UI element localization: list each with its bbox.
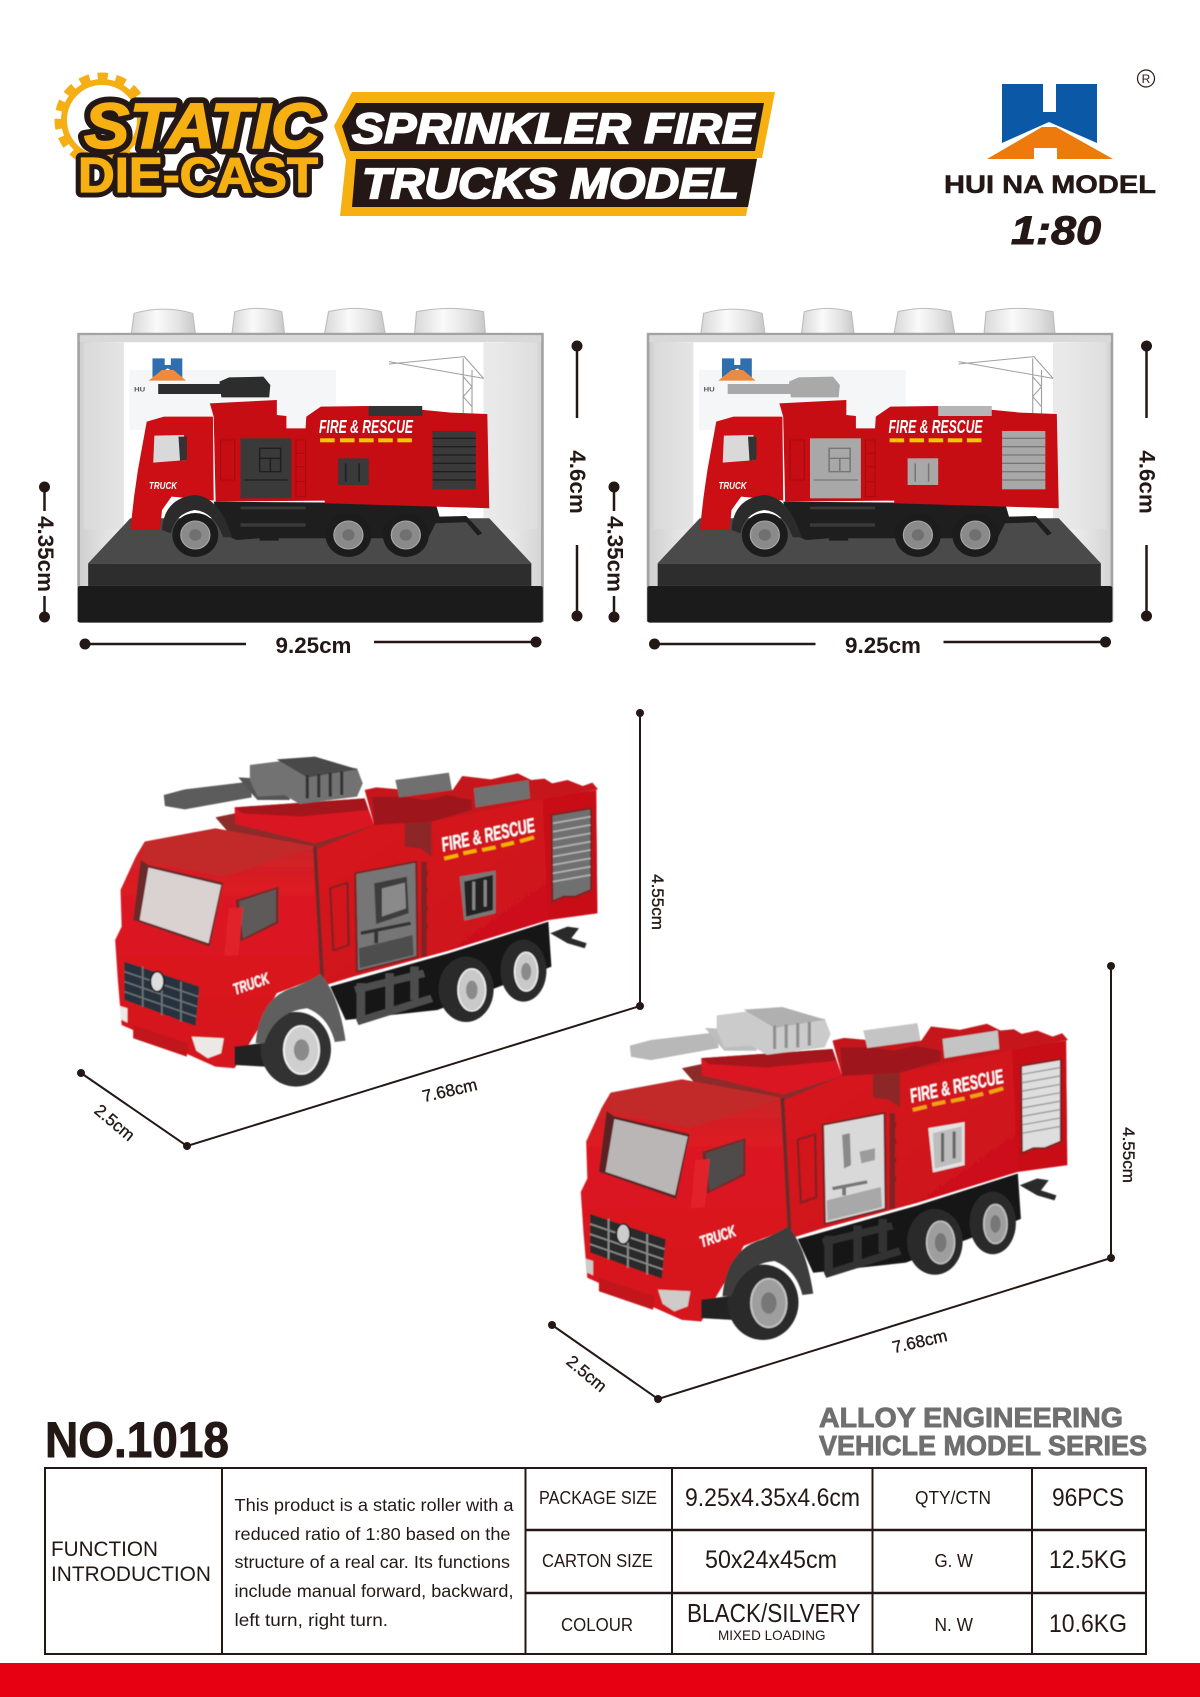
windshield <box>599 1111 690 1199</box>
colour row: COLOUR <box>561 1615 633 1635</box>
grille <box>124 962 199 1026</box>
function introduction text: This product is a static roller with a <box>234 1495 514 1515</box>
truck cab <box>130 417 214 530</box>
icon: gear <box>59 77 145 163</box>
series heading <box>819 1402 1147 1461</box>
cab rear edge <box>315 847 323 987</box>
icon: orange roof <box>987 127 1113 159</box>
brand name: HUI NA MODEL <box>944 171 1156 199</box>
truck label: fire and rescue: FIRE & RESCUE <box>319 417 414 437</box>
model number: NO.1018 <box>45 1412 229 1468</box>
package row: 96PCS <box>1052 1484 1124 1512</box>
registered mark: R <box>1142 72 1151 86</box>
middle wheel <box>907 1209 963 1275</box>
function introduction label: INTRODUCTION <box>51 1563 211 1586</box>
rear wheel <box>952 513 998 557</box>
display base <box>658 518 1101 563</box>
colour row: BLACK/SILVERY <box>687 1598 860 1628</box>
headlights <box>120 1006 224 1058</box>
box body <box>315 790 597 987</box>
chassis <box>798 1174 1021 1273</box>
clear case <box>79 334 542 621</box>
depth dimension <box>33 482 58 622</box>
roller shutter <box>551 808 591 902</box>
water cannon <box>630 1007 831 1060</box>
cab <box>115 828 321 1068</box>
middle wheel <box>439 957 494 1022</box>
package row: 9.25x4.35x4.6cm <box>685 1484 860 1512</box>
front wheel <box>701 1265 799 1340</box>
equipment on roof <box>832 1024 1068 1076</box>
case studs <box>131 308 485 333</box>
backdrop logo: HU <box>134 386 145 393</box>
panel: black turret truck <box>115 757 598 1087</box>
backdrop crane <box>958 357 1053 415</box>
side window <box>235 887 279 942</box>
display base <box>88 518 531 563</box>
specification table <box>45 1468 1146 1654</box>
mirror <box>224 907 243 956</box>
truck two dimensions <box>548 962 1138 1403</box>
truck chassis <box>783 502 1052 541</box>
height dimension: 4.6cm <box>565 450 590 514</box>
depth dimension: 4.35cm <box>602 516 628 592</box>
dimension label: height: 4.55cm <box>648 874 667 930</box>
package row: PACKAGE SIZE <box>539 1488 657 1508</box>
carton row: CARTON SIZE <box>542 1551 653 1571</box>
front wheel <box>742 513 788 557</box>
panel: silver turret truck <box>581 1007 1068 1340</box>
ladder <box>890 1113 896 1209</box>
width dimension: 9.25cm <box>845 633 921 658</box>
function introduction text: reduced ratio of 1:80 based on the <box>234 1524 510 1544</box>
roof tool boxes <box>395 773 530 807</box>
heading: die-cast: DIE-CAST <box>78 149 318 203</box>
truck one dimensions <box>77 709 667 1150</box>
truck chassis <box>214 502 482 541</box>
series heading: ALLOY ENGINEERING <box>819 1402 1123 1433</box>
water cannon <box>728 377 840 397</box>
truck label: fire and rescue: FIRE & RESCUE <box>888 417 983 437</box>
side step <box>355 967 432 1022</box>
yellow stripe <box>320 438 412 442</box>
turret platform <box>682 1064 842 1101</box>
truck body <box>210 400 489 508</box>
wheel arch <box>722 1226 813 1296</box>
headlights <box>585 1259 690 1311</box>
red footer band <box>0 1663 1200 1697</box>
icon: blue H <box>1002 84 1097 143</box>
truck label: truck: TRUCK <box>718 481 747 492</box>
body panel: tools <box>928 1122 965 1172</box>
mirror <box>691 1159 710 1208</box>
cab window <box>723 435 756 463</box>
rear wheel <box>383 513 429 557</box>
title badge: static die-cast <box>59 77 321 203</box>
heading: static: STATIC <box>84 90 321 162</box>
front wheel <box>235 1012 331 1087</box>
package row: QTY/CTN <box>915 1488 991 1508</box>
backdrop logo: HU <box>704 386 715 393</box>
backdrop logo <box>704 358 756 393</box>
middle wheel <box>325 513 371 557</box>
depth dimension: 4.35cm <box>33 516 58 592</box>
dark body recess <box>405 822 432 857</box>
depth dimension <box>602 482 628 622</box>
height dimension <box>1134 340 1160 622</box>
yellow stripe <box>890 438 981 442</box>
truck label: truck: TRUCK <box>698 1223 739 1251</box>
function introduction label: FUNCTION <box>51 1538 158 1561</box>
dimension label: depth: 2.5cm <box>563 1352 610 1396</box>
ladder <box>422 862 428 957</box>
windshield <box>133 860 223 947</box>
body panel: tools <box>460 871 496 921</box>
title banner: sprinkler fire trucks model <box>334 92 775 216</box>
side hatch <box>330 883 349 951</box>
wheel arch <box>162 495 232 537</box>
panel: black package display box <box>33 308 590 658</box>
clear case <box>648 334 1112 621</box>
colour row <box>561 1598 1127 1643</box>
heading: static: STATIC <box>84 90 321 162</box>
function introduction text <box>234 1495 514 1630</box>
body panel: pump <box>823 1113 886 1224</box>
truck label: fire and rescue: FIRE & RESCUE <box>440 815 537 857</box>
turret platform <box>215 813 374 850</box>
width dimension <box>80 633 542 658</box>
body hatch lines <box>221 440 306 497</box>
height dimension <box>565 340 590 622</box>
truck label: truck: TRUCK <box>231 970 273 999</box>
middle wheel <box>895 513 941 557</box>
carton row <box>542 1546 1127 1574</box>
side panels <box>810 431 1045 498</box>
function introduction text: structure of a real car. Its functions <box>234 1552 510 1572</box>
panel: silver package display box <box>602 308 1160 658</box>
carton row: 50x24x45cm <box>705 1546 837 1574</box>
backdrop logo <box>134 358 186 393</box>
wheel arch <box>256 974 346 1043</box>
side panels <box>240 431 476 498</box>
scale: 1:80 <box>1011 209 1101 253</box>
truck label: truck: TRUCK <box>149 481 178 492</box>
equipment on roof <box>365 773 598 825</box>
yellow stripe <box>913 1088 1003 1110</box>
colour row: MIXED LOADING <box>718 1627 826 1643</box>
width dimension <box>649 633 1111 658</box>
registered mark <box>1138 70 1154 87</box>
rear step <box>550 927 587 948</box>
dimension label: length: 7.68cm <box>420 1075 479 1106</box>
roof tool boxes <box>863 1023 999 1058</box>
heading line one: SPRINKLER FIRE <box>352 105 755 153</box>
cab window <box>153 435 187 463</box>
brand logo <box>944 70 1156 253</box>
heading line two: TRUCKS MODEL <box>362 160 739 208</box>
box body <box>782 1041 1067 1239</box>
front wheel <box>172 513 218 557</box>
truck label: fire and rescue: FIRE & RESCUE <box>908 1066 1006 1108</box>
dimension label: depth: 2.5cm <box>91 1101 138 1145</box>
rear wheel <box>970 1192 1016 1254</box>
side step <box>823 1219 900 1274</box>
wheel arch <box>732 495 802 537</box>
carton row: 12.5KG <box>1049 1546 1127 1574</box>
yellow stripe <box>444 837 534 859</box>
cab <box>581 1079 788 1322</box>
grille <box>590 1214 666 1279</box>
colour row: N. W <box>934 1615 973 1635</box>
dimension label: length: 7.68cm <box>890 1326 949 1357</box>
body panel: pump <box>355 862 417 972</box>
function introduction text: left turn, right turn. <box>234 1610 388 1630</box>
cab rear edge <box>782 1098 790 1239</box>
front bumper grille <box>599 1278 655 1310</box>
chassis <box>330 922 551 1020</box>
function introduction text: include manual forward, backward, <box>234 1581 514 1601</box>
water cannon <box>164 757 363 809</box>
function introduction label <box>51 1538 211 1586</box>
water cannon <box>158 377 270 397</box>
body hatch lines <box>790 440 875 497</box>
backdrop crane <box>389 357 483 415</box>
rear wheel <box>501 940 546 1002</box>
series heading: VEHICLE MODEL SERIES <box>819 1430 1147 1461</box>
dimension label: height: 4.55cm <box>1119 1127 1138 1183</box>
side hatch <box>798 1134 816 1203</box>
truck cab <box>700 417 783 530</box>
dark body recess <box>873 1073 900 1108</box>
width dimension: 9.25cm <box>276 633 351 658</box>
height dimension: 4.6cm <box>1134 450 1160 514</box>
roller shutter <box>1021 1059 1061 1153</box>
heading: die-cast: DIE-CAST <box>78 149 318 203</box>
front bumper grille <box>133 1025 189 1057</box>
truck body <box>779 400 1059 508</box>
package row <box>539 1484 1124 1512</box>
colour row: 10.6KG <box>1049 1610 1127 1638</box>
case studs <box>701 308 1055 333</box>
carton row: G. W <box>934 1551 973 1571</box>
side window <box>702 1138 746 1194</box>
rear step <box>1020 1179 1056 1200</box>
